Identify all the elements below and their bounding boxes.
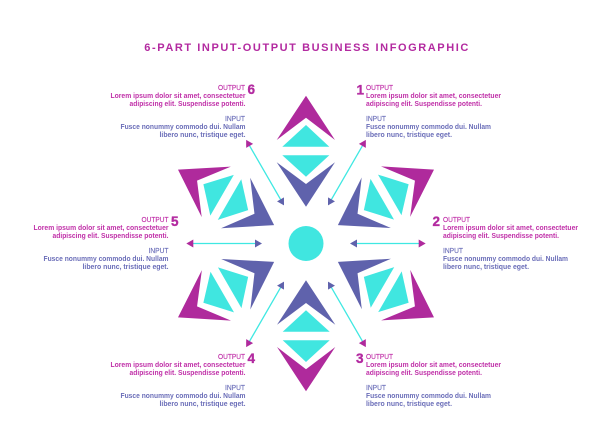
- text block 3: 3: [356, 351, 364, 366]
- text block 1: INPUT: [366, 114, 386, 123]
- text block 5: Lorem ipsum dolor sit amet, consectetuer: [34, 223, 169, 232]
- text block 4: adipiscing elit. Suspendisse potenti.: [130, 368, 246, 377]
- segment 5: upper left triangles: [163, 144, 289, 250]
- segment 2: lower right triangles: [323, 237, 449, 343]
- text block 4: 4: [248, 351, 256, 366]
- arrow: lower left: [243, 280, 287, 349]
- text block 5: adipiscing elit. Suspendisse potenti.: [52, 231, 168, 240]
- arrow: left: [186, 240, 262, 248]
- segment 3: bottom triangles: [277, 280, 335, 391]
- text block 2: OUTPUT: [443, 215, 470, 224]
- text block 2: Lorem ipsum dolor sit amet, consectetuer: [443, 223, 578, 232]
- segment 6: top triangles: [277, 96, 335, 207]
- text block 2: Fusce nonummy commodo dui. Nullam: [443, 254, 568, 263]
- text block 1: Lorem ipsum dolor sit amet, consectetuer: [366, 91, 501, 100]
- text block 6: INPUT: [225, 114, 245, 123]
- text block 6: 6: [248, 82, 256, 97]
- arrow: upper right: [325, 138, 369, 207]
- segment 1: upper right triangles: [323, 144, 448, 250]
- text block 3: adipiscing elit. Suspendisse potenti.: [366, 368, 482, 377]
- text block 6: adipiscing elit. Suspendisse potenti.: [130, 99, 246, 108]
- segment 4: lower left triangles: [164, 237, 289, 343]
- text block 3: OUTPUT: [366, 352, 393, 361]
- arrow: upper left: [243, 138, 287, 207]
- text block 5: libero nunc, tristique eget.: [82, 262, 168, 271]
- title: 6-PART INPUT-OUTPUT BUSINESS INFOGRAPHIC: [144, 42, 468, 54]
- text block 2: INPUT: [443, 246, 463, 255]
- text block 6: Lorem ipsum dolor sit amet, consectetuer: [110, 91, 246, 100]
- text block 5: OUTPUT: [142, 215, 169, 224]
- text block 1: adipiscing elit. Suspendisse potenti.: [366, 99, 482, 108]
- text block 4: OUTPUT: [218, 352, 245, 361]
- text block 5: [34, 214, 179, 271]
- text block 3: Lorem ipsum dolor sit amet, consectetuer: [366, 360, 501, 369]
- text block 3: INPUT: [366, 383, 386, 392]
- arrow: right: [350, 240, 426, 248]
- arrow: lower right: [325, 280, 369, 349]
- text block 4: Lorem ipsum dolor sit amet, consectetuer: [110, 360, 246, 369]
- text block 2: adipiscing elit. Suspendisse potenti.: [443, 231, 559, 240]
- text block 1: libero nunc, tristique eget.: [366, 130, 452, 139]
- text block 1: [356, 82, 501, 139]
- text block 2: [432, 214, 578, 271]
- text block 4: Fusce nonummy commodo dui. Nullam: [120, 391, 246, 400]
- text block 3: libero nunc, tristique eget.: [366, 399, 452, 408]
- text block 5: Fusce nonummy commodo dui. Nullam: [44, 254, 169, 263]
- text block 6: Fusce nonummy commodo dui. Nullam: [120, 122, 246, 131]
- text block 4: libero nunc, tristique eget.: [160, 399, 246, 408]
- text block 4: INPUT: [225, 383, 245, 392]
- text block 6: libero nunc, tristique eget.: [160, 130, 246, 139]
- text block 1: OUTPUT: [366, 83, 393, 92]
- text block 6: [110, 82, 256, 139]
- text block 2: libero nunc, tristique eget.: [443, 262, 529, 271]
- text block 5: 5: [171, 214, 179, 229]
- text block 1: 1: [356, 82, 364, 98]
- text block 3: Fusce nonummy commodo dui. Nullam: [366, 391, 491, 400]
- text block 3: [356, 351, 501, 408]
- central circle: [288, 226, 324, 261]
- text block 6: OUTPUT: [218, 83, 245, 92]
- text block 1: Fusce nonummy commodo dui. Nullam: [366, 122, 491, 131]
- text block 4: [110, 351, 256, 408]
- text block 2: 2: [432, 214, 440, 229]
- text block 5: INPUT: [148, 246, 169, 255]
